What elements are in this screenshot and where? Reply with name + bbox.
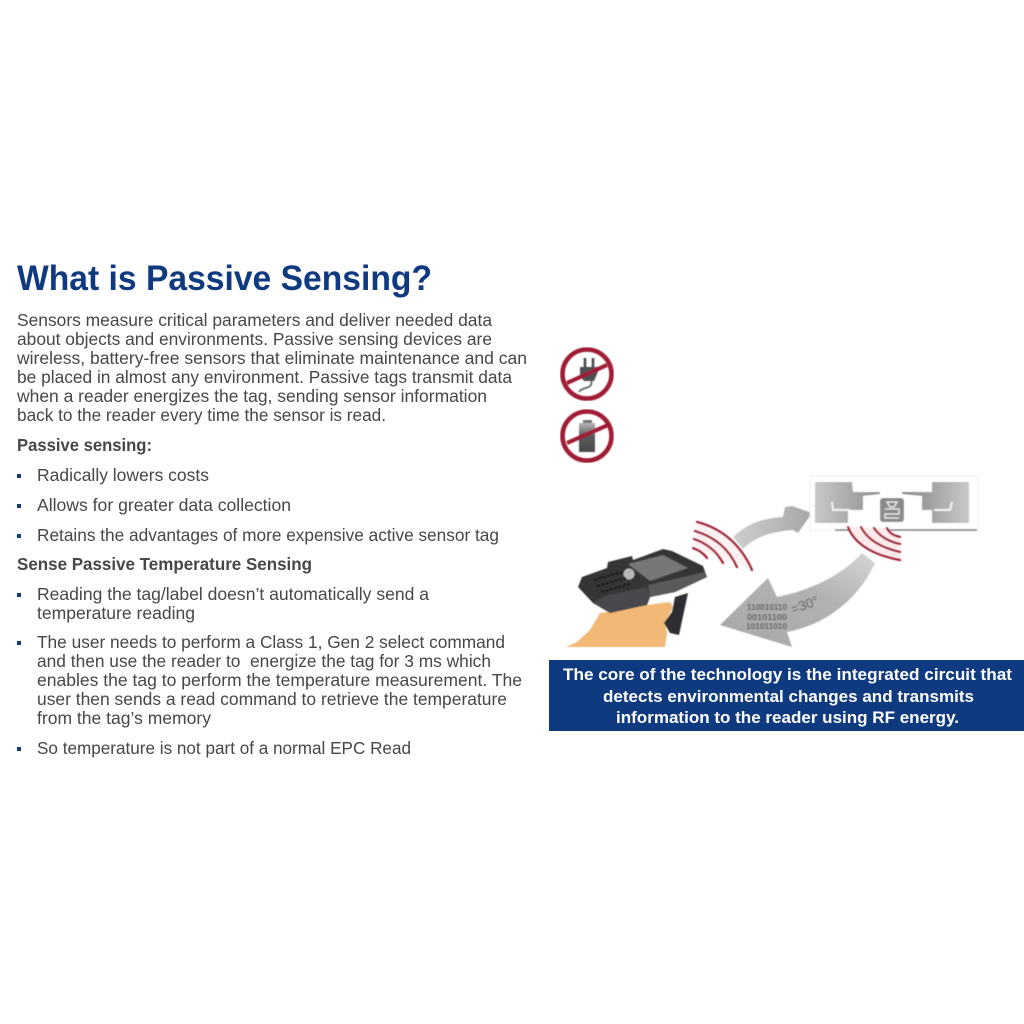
- bullet list: passive sensing: [17, 465, 499, 545]
- bullet list: temperature sensing: So temperature is not part of a normal EPC Read: [37, 738, 411, 758]
- binary data: 110010110: [747, 603, 788, 612]
- bullet list: temperature sensing: [17, 584, 522, 758]
- arrow: tag to reader: [720, 553, 875, 647]
- heading: passive sensing: Passive sensing:: [17, 435, 152, 455]
- bullet list: temperature sensing: Reading the tag/label doesn’t automatically send a: [37, 584, 429, 604]
- binary data: [746, 603, 788, 631]
- binary data: 101011010: [746, 622, 788, 631]
- title: What is Passive Sensing?: [17, 259, 432, 298]
- hand: [566, 602, 673, 647]
- heading: temperature sensing: Sense Passive Temperature Sensing: [17, 554, 312, 574]
- intro paragraph: when a reader energizes the tag, sending sensor information: [16, 386, 487, 406]
- intro paragraph: back to the reader every time the sensor is read.: [17, 405, 386, 425]
- handheld reader: [578, 549, 707, 613]
- diagram: reader and tag: [566, 476, 978, 647]
- callout banner: information to the reader using RF energy.: [616, 708, 959, 727]
- callout banner: detects environmental changes and transmits: [603, 687, 974, 706]
- callout banner: [549, 660, 1024, 731]
- intro paragraph: be placed in almost any environment. Passive tags transmit data: [17, 367, 512, 387]
- bullet list: passive sensing: Radically lowers costs: [37, 465, 209, 485]
- arrow: reader to tag: [733, 506, 812, 549]
- intro paragraph: [16, 310, 527, 425]
- bullet list: temperature sensing: The user needs to perform a Class 1, Gen 2 select command: [37, 632, 505, 652]
- callout banner: The core of the technology is the integrated circuit that: [563, 665, 1012, 684]
- icon: no plug: [562, 350, 612, 398]
- rfid tag: [810, 476, 978, 530]
- bullet list: temperature sensing: and then use the reader to energize the tag for 3 ms which: [37, 651, 491, 671]
- reader handle: [664, 593, 688, 635]
- binary data: 00101100: [747, 613, 788, 622]
- intro paragraph: wireless, battery-free sensors that eliminate maintenance and can: [16, 348, 527, 368]
- radio waves: reader: [693, 522, 752, 570]
- bullet list: passive sensing: Allows for greater data collection: [37, 495, 291, 515]
- icon: no battery: [562, 412, 612, 460]
- intro paragraph: Sensors measure critical parameters and deliver needed data: [17, 310, 492, 330]
- bullet list: temperature sensing: enables the tag to perform the temperature measurement. The: [37, 670, 522, 690]
- bullet list: passive sensing: Retains the advantages of more expensive active sensor tag: [37, 525, 499, 545]
- radio waves: tag: [848, 527, 900, 560]
- bullet list: temperature sensing: temperature reading: [37, 603, 195, 623]
- intro paragraph: about objects and environments. Passive sensing devices are: [17, 329, 492, 349]
- angle label: =30°: [789, 593, 821, 617]
- bullet list: temperature sensing: from the tag’s memory: [37, 708, 211, 728]
- bullet list: temperature sensing: user then sends a read command to retrieve the temperature: [37, 689, 507, 709]
